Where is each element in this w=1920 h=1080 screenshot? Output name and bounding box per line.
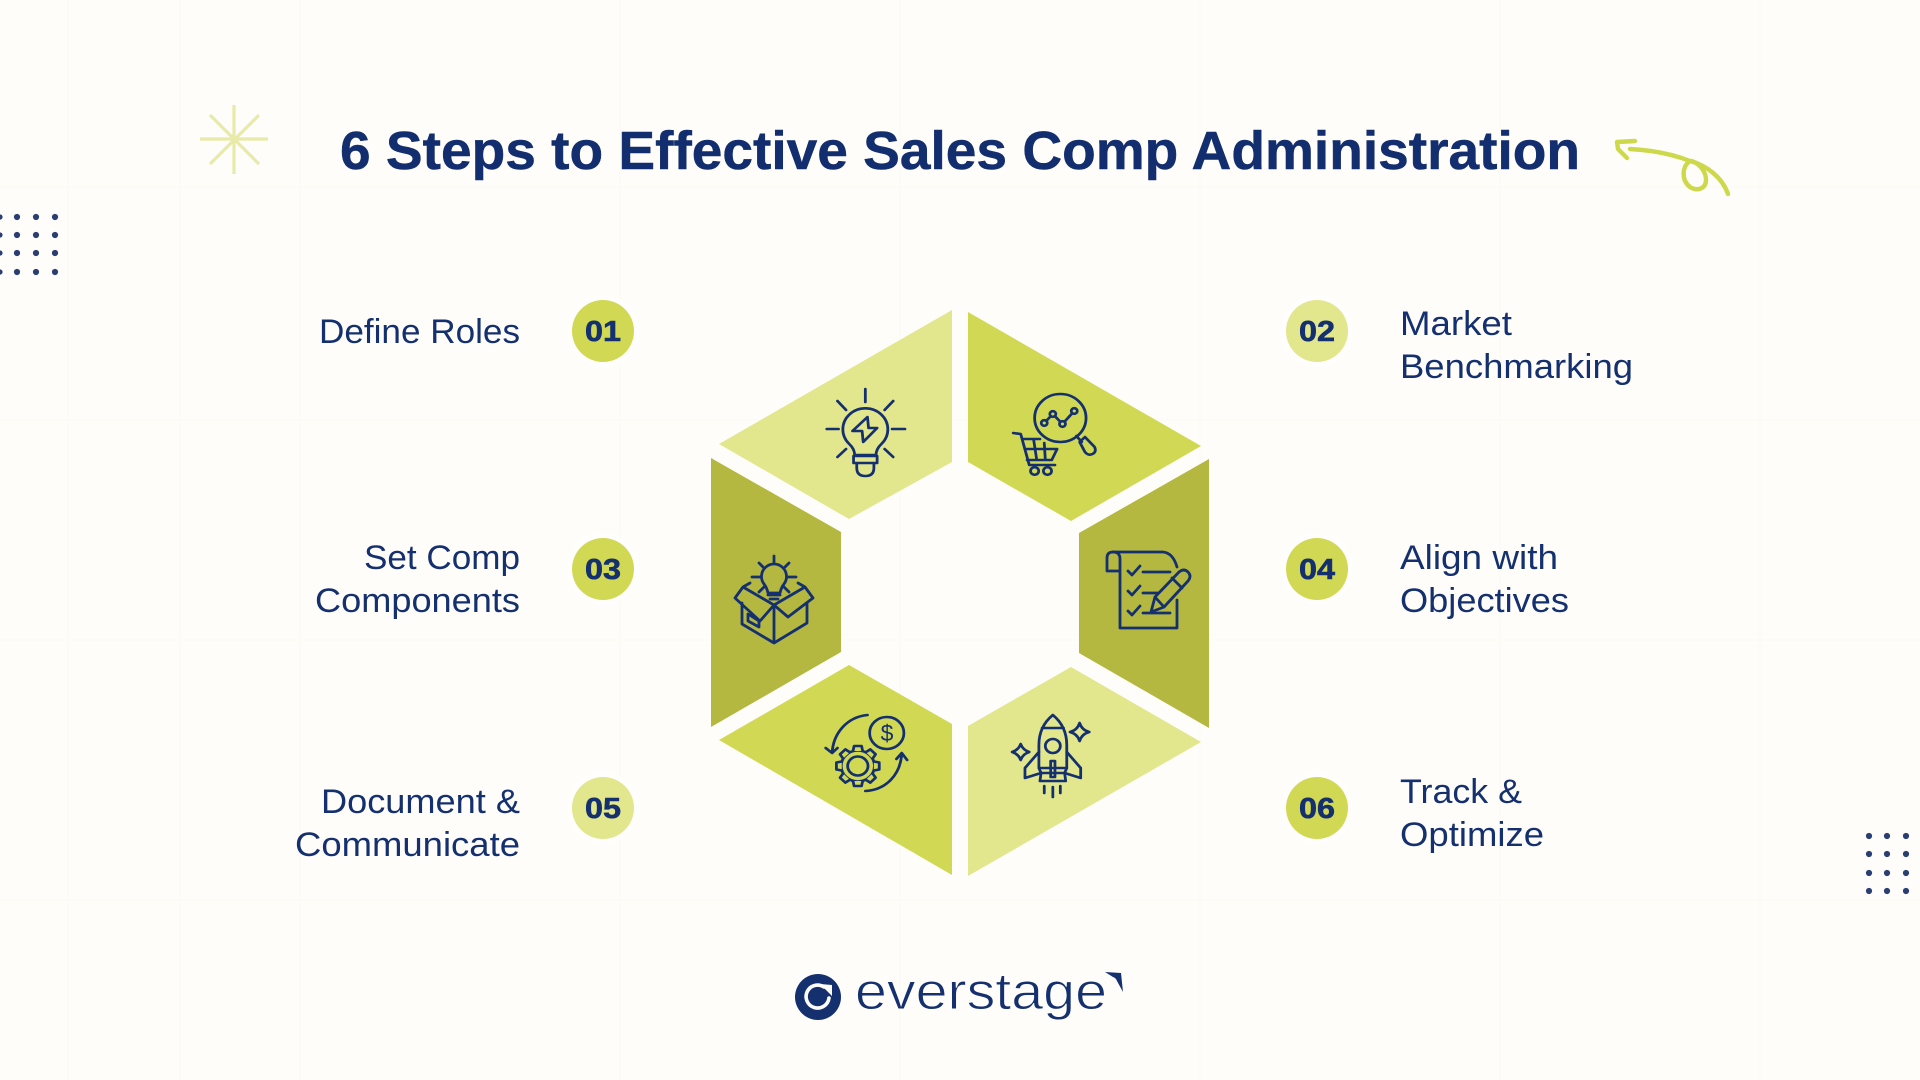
label: Align with Objectives bbox=[1400, 539, 1569, 620]
label: Document & Communicate: Communicate bbox=[295, 826, 520, 864]
segment 4: checklist bbox=[1079, 459, 1209, 728]
label: Align with Objectives: Objectives bbox=[1400, 582, 1569, 620]
logo mark bbox=[795, 974, 841, 1020]
badge 01: 01 bbox=[585, 316, 621, 348]
decorative star bbox=[200, 105, 268, 174]
badge 06 bbox=[1281, 772, 1353, 844]
segment 3: idea box bbox=[711, 458, 841, 727]
icon: lightbulb bbox=[827, 389, 905, 476]
badge 04 bbox=[1281, 533, 1353, 605]
badge 05: 05 bbox=[585, 793, 621, 825]
step 05 bbox=[295, 772, 639, 864]
title: 6 Steps to Effective Sales Comp Administration bbox=[340, 121, 1580, 181]
label: Market Benchmarking: Market bbox=[1400, 305, 1513, 343]
label: Track & Optimize bbox=[1400, 773, 1544, 854]
label: Align with Objectives: Align with bbox=[1400, 539, 1558, 577]
label: Track & Optimize: Optimize bbox=[1400, 816, 1544, 854]
label: Define Roles: Define Roles bbox=[319, 313, 520, 351]
label: Set Comp Components: Components bbox=[315, 582, 520, 620]
label: Track & Optimize: Track & bbox=[1400, 773, 1522, 811]
badge 03 bbox=[567, 533, 639, 605]
segment 1: lightbulb bbox=[719, 310, 952, 519]
step 06 bbox=[1281, 772, 1544, 854]
icon: checklist and pencil bbox=[1107, 552, 1190, 628]
dot grid right bbox=[1866, 833, 1909, 894]
icon: cart and magnifier bbox=[1013, 394, 1095, 475]
badge 02: 02 bbox=[1299, 316, 1335, 348]
squiggle arrow bbox=[1617, 141, 1728, 194]
segment 2: market search bbox=[968, 312, 1201, 521]
step 01 bbox=[319, 295, 639, 367]
badge 04: 04 bbox=[1299, 554, 1335, 586]
segment 6: rocket bbox=[968, 667, 1201, 876]
icon: rocket bbox=[1012, 715, 1089, 797]
badge 06: 06 bbox=[1299, 793, 1335, 825]
label: Market Benchmarking: Benchmarking bbox=[1400, 348, 1633, 386]
badge 02 bbox=[1281, 295, 1353, 367]
hexagon diagram bbox=[711, 310, 1209, 876]
logo wordmark: everstage bbox=[855, 963, 1107, 1021]
label: Market Benchmarking bbox=[1400, 305, 1633, 386]
icon: box with lightbulb bbox=[735, 556, 813, 643]
label: Document & Communicate bbox=[295, 783, 520, 864]
dot grid left bbox=[0, 214, 58, 275]
label: Set Comp Components bbox=[315, 539, 520, 620]
badge 03: 03 bbox=[585, 554, 621, 586]
logo accent bbox=[1105, 972, 1123, 992]
label: Set Comp Components: Set Comp bbox=[364, 539, 520, 577]
segment 5: pay cycle bbox=[719, 665, 952, 875]
label: Document & Communicate: Document & bbox=[321, 783, 520, 821]
step 03 bbox=[315, 533, 639, 620]
logo: everstage bbox=[795, 963, 1123, 1021]
badge 05 bbox=[567, 772, 639, 844]
step 04 bbox=[1281, 533, 1569, 620]
badge 01 bbox=[567, 295, 639, 367]
dollar sign: $ bbox=[881, 720, 894, 746]
step 02 bbox=[1281, 295, 1633, 386]
icon: gear and dollar cycle bbox=[826, 715, 907, 791]
